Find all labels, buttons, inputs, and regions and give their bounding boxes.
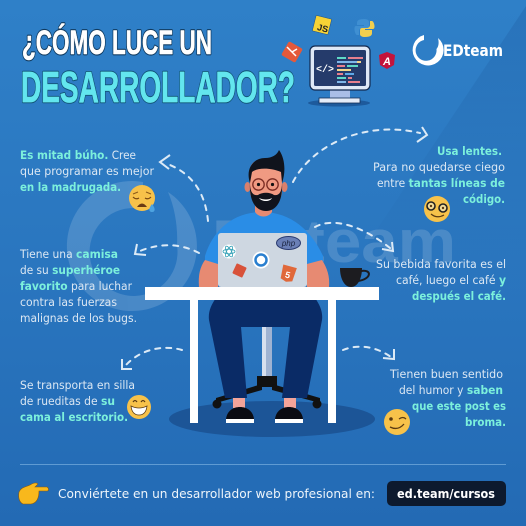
sticker: HTML5: 5 — [284, 269, 291, 280]
coffee cup — [340, 268, 369, 287]
text: coffee: café, luego el café y — [396, 274, 507, 287]
text: coffee — [376, 258, 507, 303]
text: owl: Es mitad búho. Cree — [20, 149, 136, 162]
icon: Git — [281, 41, 303, 63]
watermark logo: EDteam — [212, 208, 456, 275]
emoji: wink — [384, 409, 410, 435]
laptop — [218, 233, 307, 287]
icon: Python — [354, 19, 375, 37]
text: humor: Tienen buen sentido — [389, 368, 503, 381]
footer text: Conviértete en un desarrollador web profesional en: — [58, 487, 375, 501]
text: owl: en la madrugada. — [20, 181, 121, 194]
text: shirt: de su superhéroe — [20, 264, 120, 277]
text: chair: Se transporta en silla — [20, 379, 135, 392]
shirt — [205, 212, 323, 266]
text: coffee: Su bebida favorita es el — [376, 258, 506, 271]
title: DESARROLLADOR? — [21, 63, 295, 112]
icon: Angular: A — [382, 56, 391, 68]
right shoe — [275, 398, 303, 423]
icon: monitor with code: </> — [316, 64, 334, 76]
text: glasses: Para no quedarse ciego — [373, 161, 505, 174]
desk — [145, 287, 379, 423]
text: shirt: contra las fuerzas — [20, 296, 117, 309]
title: ¿CÓMO LUCE UN — [22, 24, 212, 62]
watermark logo — [67, 181, 456, 311]
emoji: glasses — [424, 196, 450, 222]
text: shirt: favorito para luchar — [20, 280, 132, 293]
arrow: to humor text — [343, 347, 394, 359]
text: humor: del humor y saben — [399, 384, 503, 397]
text: shirt — [19, 248, 137, 325]
text: shirt: Tiene una camisa — [19, 248, 118, 261]
left shoe — [226, 398, 254, 423]
developer illustration — [145, 150, 379, 437]
text: humor: broma. — [465, 416, 506, 429]
arrow: to coffee text — [315, 223, 393, 251]
text: chair: de rueditas de su — [20, 395, 115, 408]
emoji: sleepy — [129, 185, 155, 212]
title — [21, 24, 295, 112]
arrow: to shirt text — [135, 244, 199, 255]
logo: EDteam — [413, 35, 503, 65]
icon: JavaScript: JS — [316, 22, 329, 34]
title: DESARROLLADOR? — [21, 63, 295, 112]
neck — [255, 203, 272, 216]
text: glasses — [373, 145, 505, 206]
sticker: php: php — [281, 239, 296, 248]
arrow: to owl text — [160, 155, 208, 221]
sticker: EDteam — [252, 252, 270, 268]
text: glasses: código. — [463, 193, 505, 206]
text: glasses: Usa lentes. — [437, 145, 502, 158]
head — [244, 150, 288, 211]
arms — [199, 260, 218, 287]
footer divider — [20, 464, 506, 465]
text: humor: que este post es — [412, 400, 506, 413]
icon: JavaScript — [312, 15, 332, 35]
trousers — [209, 298, 322, 398]
text: humor — [389, 368, 506, 429]
logo: EDteam: EDteam — [443, 41, 503, 60]
text: chair: cama al escritorio. — [20, 411, 128, 424]
arrow: to glasses text — [293, 127, 427, 182]
text: glasses: entre tantas líneas de — [377, 177, 505, 190]
icon: pointing hand — [19, 483, 48, 504]
title: ¿CÓMO LUCE UN — [22, 24, 212, 62]
text: chair — [20, 379, 135, 424]
icon: monitor with code — [308, 46, 370, 106]
text: owl — [20, 149, 154, 194]
text: coffee: después el café. — [412, 290, 506, 303]
footer link button — [387, 481, 506, 506]
floor shadow — [169, 401, 375, 437]
text: shirt: malignas de los bugs. — [20, 312, 137, 325]
arrow: to chair text — [122, 348, 182, 369]
footer link button: ed.team/cursos — [397, 487, 495, 501]
sticker: Git — [232, 263, 247, 278]
chair — [212, 326, 322, 408]
text: owl: que programar es mejor — [20, 165, 154, 178]
icon: Angular — [379, 52, 395, 69]
sticker: React — [222, 244, 236, 258]
emoji: grin — [127, 395, 151, 419]
